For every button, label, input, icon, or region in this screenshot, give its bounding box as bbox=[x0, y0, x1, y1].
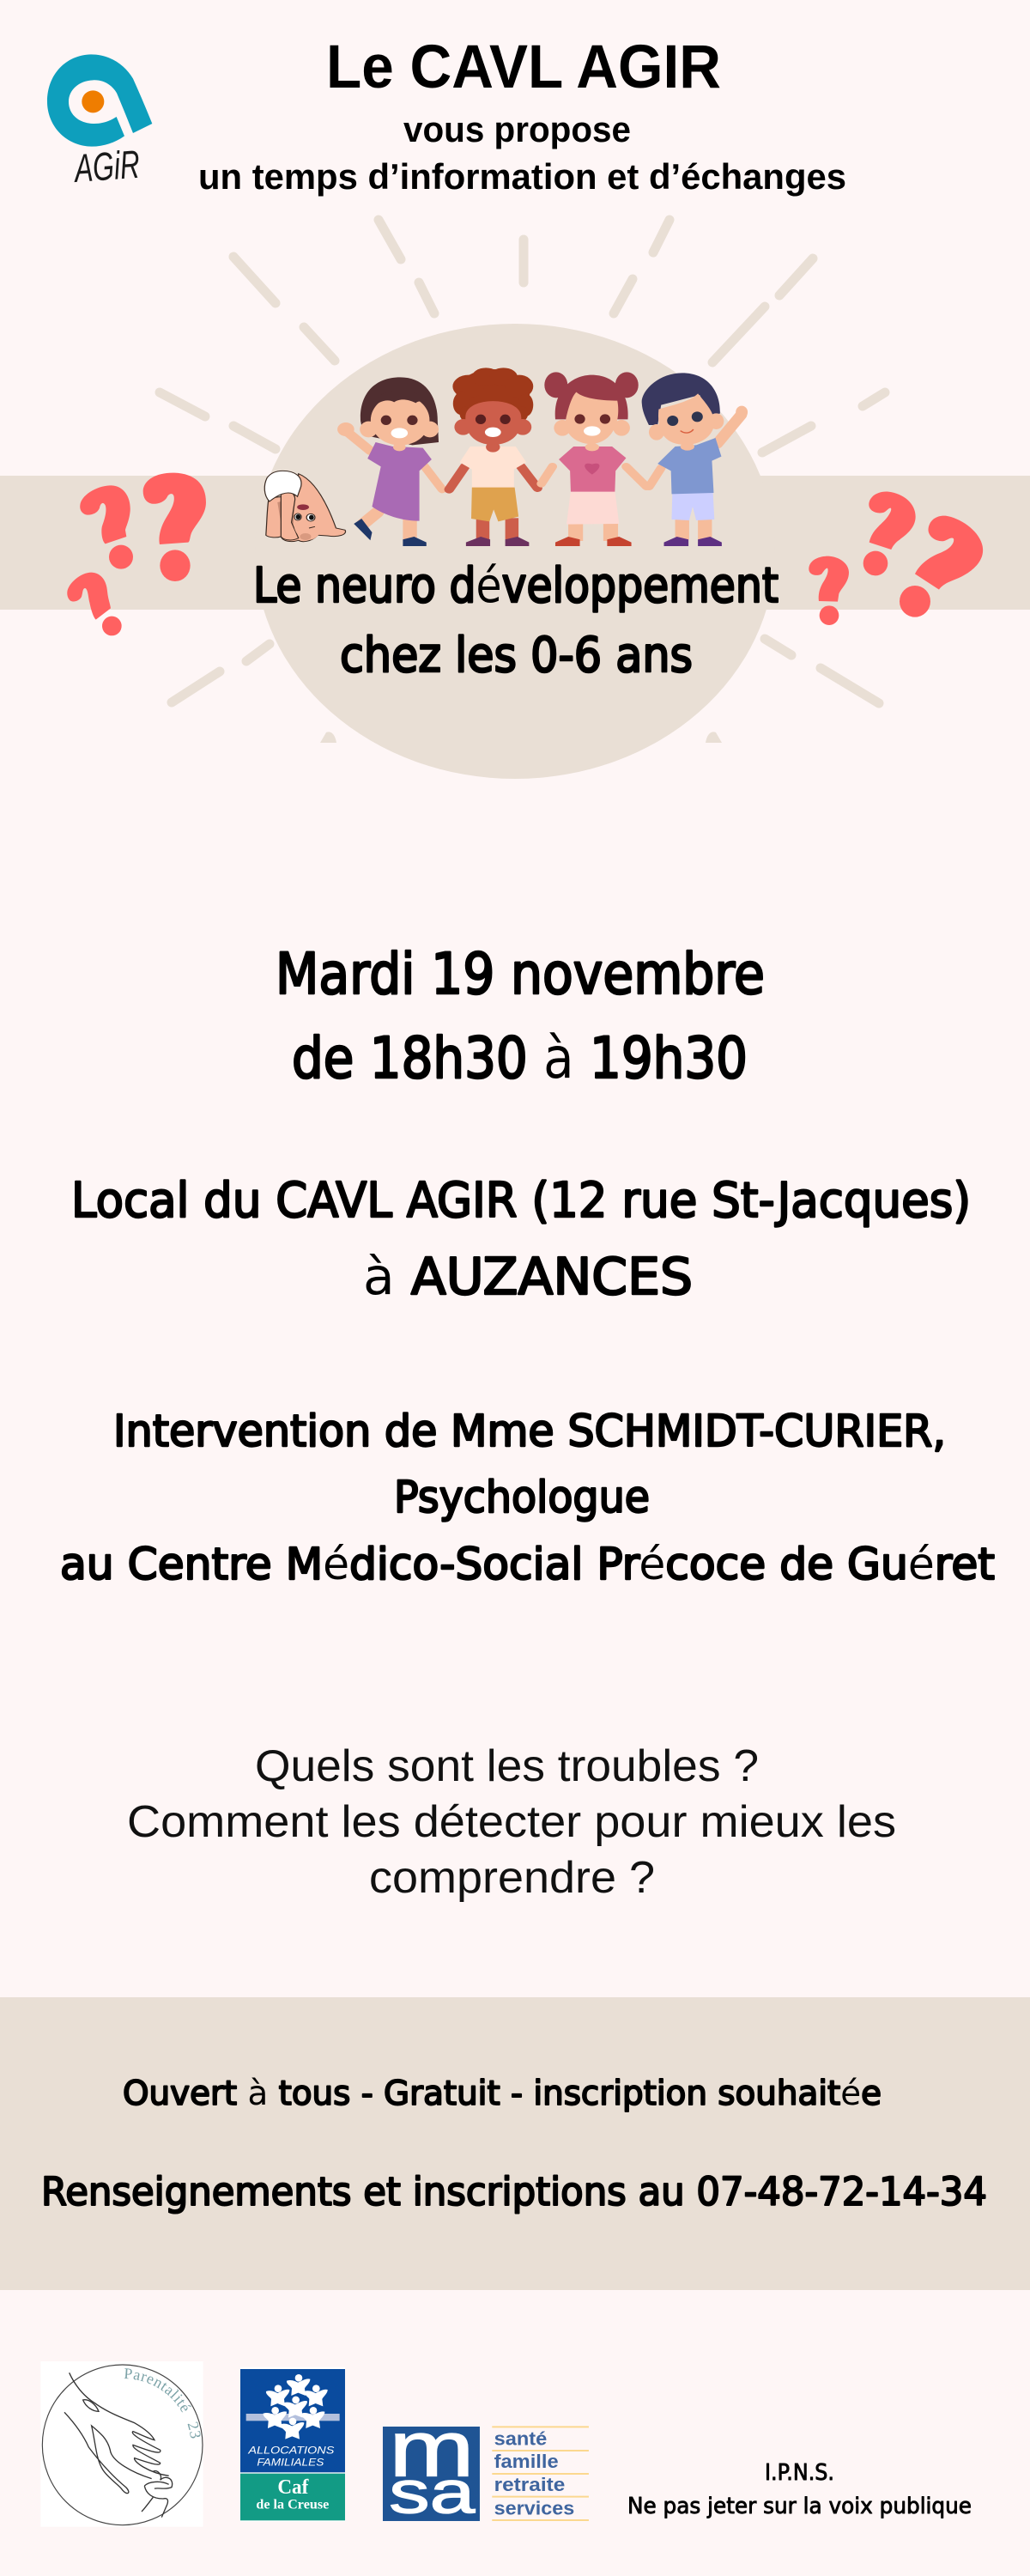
text: contact: Renseignements et inscriptions au 07-48-72-14-34 bbox=[41, 2169, 987, 2215]
icon: question marks left bbox=[67, 473, 206, 635]
panel: hero band bbox=[0, 476, 1030, 610]
panel: info band bbox=[0, 1997, 1030, 2290]
illustration: baby and children bbox=[264, 368, 748, 546]
logo: MSA: retraite bbox=[494, 2474, 565, 2495]
icon: question marks right bbox=[809, 492, 983, 625]
title: Le CAVL AGIR bbox=[326, 33, 721, 101]
logo: Parentalité 23 bbox=[41, 2361, 203, 2526]
heading: neurodevelopment bbox=[253, 558, 779, 683]
text: speaker: au Centre Médico-Social Précoce de Guéret bbox=[60, 1540, 995, 1590]
text: location: Local du CAVL AGIR (12 rue St-Jacques) bbox=[71, 1173, 971, 1229]
text: speaker bbox=[60, 1406, 995, 1590]
text: questions: Comment les détecter pour mieux les bbox=[127, 1797, 896, 1847]
logo: Caf de la Creuse: ALLOCATIONS bbox=[247, 2444, 335, 2456]
text: location bbox=[71, 1173, 971, 1306]
subtitle: vous propose bbox=[403, 109, 631, 149]
text: speaker: Intervention de Mme SCHMIDT-CURIER, bbox=[113, 1406, 946, 1457]
text: date and time bbox=[276, 941, 765, 1091]
heading: neurodevelopment: chez les 0-6 ans bbox=[340, 628, 693, 683]
panel: hero ellipse bbox=[255, 324, 775, 779]
logo: MSA: sa bbox=[389, 2459, 476, 2526]
logo: CAVL AGIR: AGiR bbox=[71, 142, 142, 191]
icon: crawling baby bbox=[264, 471, 346, 542]
logo: MSA: santé bbox=[494, 2427, 547, 2449]
subtitle bbox=[198, 109, 846, 197]
logo: Caf de la Creuse: FAMILIALES bbox=[257, 2457, 324, 2469]
logo: Parentalité 23: Parentalité 23 bbox=[124, 2368, 201, 2439]
text: legal notice: Ne pas jeter sur la voix publique bbox=[627, 2494, 972, 2519]
logo: MSA: m bbox=[389, 2405, 475, 2493]
text: date and time: de 18h30 à 19h30 bbox=[292, 1025, 748, 1091]
text: questions bbox=[127, 1741, 896, 1903]
text: legal notice bbox=[627, 2460, 972, 2519]
child: girl in purple dress bbox=[337, 377, 442, 546]
text: open to all: Ouvert à tous - Gratuit - inscription souhaitée bbox=[123, 2075, 882, 2113]
logo: Caf de la Creuse: Caf bbox=[277, 2476, 309, 2499]
child: girl in pink bbox=[542, 372, 646, 546]
text: location: à AUZANCES bbox=[363, 1247, 693, 1306]
logo: Caf de la Creuse: de la Creuse bbox=[256, 2498, 330, 2512]
logo: MSA bbox=[383, 2405, 589, 2526]
text: date and time: Mardi 19 novembre bbox=[276, 941, 765, 1007]
text: speaker: Psychologue bbox=[394, 1473, 650, 1523]
child: boy in yellow shorts bbox=[449, 368, 537, 546]
logo: MSA: services bbox=[494, 2497, 574, 2518]
child: boy in blue bbox=[642, 373, 748, 546]
text: questions: Quels sont les troubles ? bbox=[255, 1741, 759, 1791]
subtitle: un temps d’information et d’échanges bbox=[198, 156, 846, 197]
text: questions: comprendre ? bbox=[369, 1853, 655, 1903]
decorative sunburst rays bbox=[160, 220, 885, 743]
text: legal notice: I.P.N.S. bbox=[765, 2460, 834, 2486]
logo: Caf de la Creuse bbox=[240, 2367, 345, 2522]
heading: neurodevelopment: Le neuro développement bbox=[253, 558, 779, 614]
logo: CAVL AGIR bbox=[47, 54, 152, 191]
logo: MSA: famille bbox=[494, 2451, 559, 2472]
